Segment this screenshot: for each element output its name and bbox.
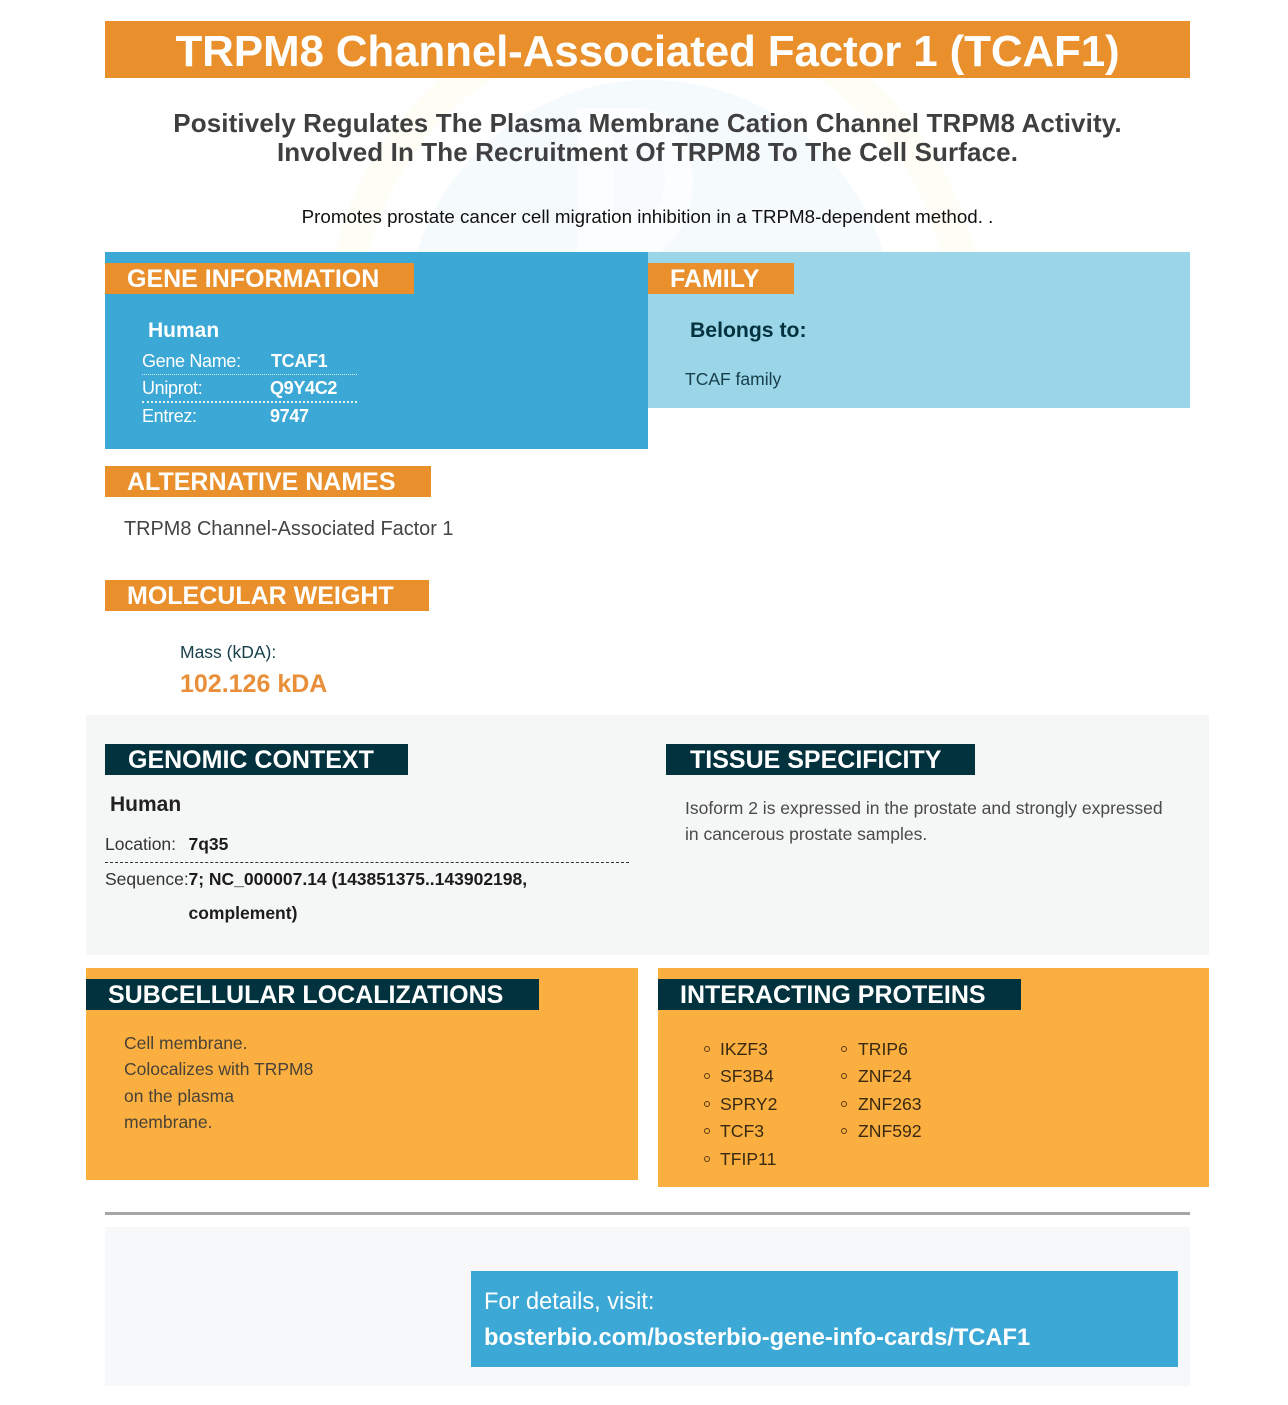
panel: alternative names: [105, 466, 453, 540]
footer rule: [105, 1212, 1190, 1215]
protein list column 1: [704, 1039, 777, 1169]
panel: footer: [105, 1227, 1190, 1386]
location row: [105, 832, 629, 863]
callout url: bosterbio.com/bosterbio-gene-info-cards/TCAF1: [484, 1325, 1030, 1351]
panel: gene information: [105, 252, 648, 449]
protein list column 1: SPRY2: [720, 1094, 777, 1114]
heading: molecular weight: MOLECULAR WEIGHT: [127, 582, 394, 610]
panel: subcellular localizations: [86, 968, 638, 1180]
uniprot row: Uniprot:: [142, 378, 202, 398]
protein list column 2: ZNF263: [858, 1094, 922, 1114]
heading: subcellular localizations: SUBCELLULAR LOCALIZATIONS: [108, 981, 503, 1009]
localization text: Colocalizes with TRPM8: [124, 1059, 313, 1079]
callout label: For details, visit:: [484, 1289, 654, 1315]
localization text: on the plasma: [124, 1086, 234, 1106]
protein list column 1: SF3B4: [720, 1066, 774, 1086]
subtitle: [173, 108, 1122, 167]
subtitle: Involved In The Recruitment Of TRPM8 To The Cell Surface.: [277, 137, 1018, 167]
entrez row: 9747: [270, 406, 309, 426]
protein list column 1: TFIP11: [720, 1149, 776, 1169]
family value: TCAF family: [685, 369, 781, 389]
localization text: Cell membrane.: [124, 1033, 248, 1053]
heading: family: FAMILY: [670, 265, 759, 293]
protein list column 1: IKZF3: [720, 1039, 768, 1059]
uniprot row: [142, 376, 357, 403]
title banner: TRPM8 Channel-Associated Factor 1 (TCAF1): [175, 27, 1120, 76]
sequence row: Sequence:: [105, 869, 189, 889]
heading: family: [648, 263, 794, 294]
belongs to label: Belongs to:: [690, 319, 807, 342]
tissue specificity text: [685, 798, 1163, 844]
sequence row: 7; NC_000007.14 (143851375..143902198,: [188, 869, 527, 889]
panel: genomic and tissue background: [86, 715, 1209, 955]
function description: Promotes prostate cancer cell migration inhibition in a TRPM8-dependent method. .: [302, 206, 993, 227]
panel: interacting proteins: [658, 968, 1209, 1187]
heading: genomic context: GENOMIC CONTEXT: [128, 746, 374, 774]
watermark logo: [336, 78, 974, 252]
callout: details link: [471, 1271, 1178, 1367]
heading: alternative names: ALTERNATIVE NAMES: [127, 468, 396, 496]
uniprot row: Q9Y4C2: [270, 378, 337, 398]
heading: gene information: GENE INFORMATION: [127, 265, 379, 293]
protein list column 2: ZNF592: [858, 1121, 922, 1141]
species label: Human: [110, 793, 181, 816]
localization text: membrane.: [124, 1112, 213, 1132]
panel: family: [648, 252, 1190, 408]
heading: interacting proteins: INTERACTING PROTEINS: [680, 981, 986, 1009]
location row: Location:: [105, 834, 176, 854]
sequence row: complement): [188, 903, 297, 923]
mass value: 102.126 kDA: [180, 670, 327, 698]
gene name row: Gene Name:: [142, 351, 241, 371]
heading: tissue specificity: TISSUE SPECIFICITY: [690, 746, 941, 774]
tissue specificity text: in cancerous prostate samples.: [685, 824, 927, 844]
protein list column 2: ZNF24: [858, 1066, 912, 1086]
location row: 7q35: [188, 834, 228, 854]
gene name row: TCAF1: [271, 351, 327, 371]
alternative name text: TRPM8 Channel-Associated Factor 1: [124, 518, 453, 540]
subtitle: Positively Regulates The Plasma Membrane Cation Channel TRPM8 Activity.: [173, 108, 1122, 138]
tissue specificity text: Isoform 2 is expressed in the prostate and strongly expressed: [685, 798, 1163, 818]
protein list column 1: TCF3: [720, 1121, 764, 1141]
entrez row: [142, 406, 309, 426]
protein list column 2: TRIP6: [858, 1039, 908, 1059]
gene name row: [142, 349, 357, 375]
species label: Human: [148, 319, 219, 342]
localization text: [124, 1033, 313, 1132]
sequence row: [105, 869, 527, 923]
mass label: Mass (kDA):: [180, 642, 276, 662]
entrez row: Entrez:: [142, 406, 197, 426]
panel: molecular weight: [105, 580, 429, 698]
protein list column 2: [841, 1039, 922, 1141]
